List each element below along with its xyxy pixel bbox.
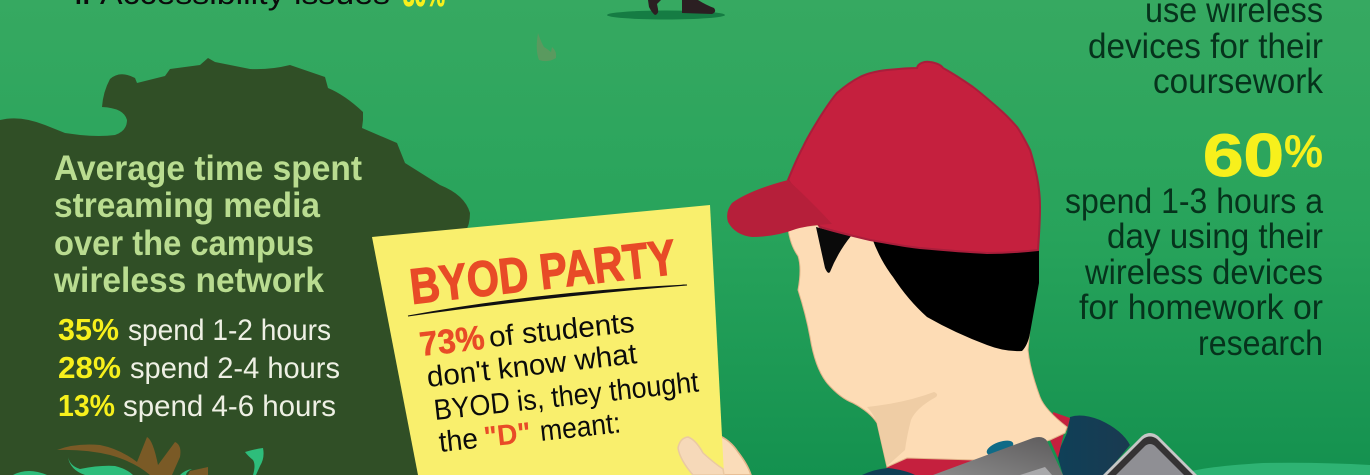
text: hours a day: wireless devices (1084, 253, 1323, 292)
tree leaves (13, 448, 264, 475)
text: use wireless devices: devices for their (1088, 27, 1323, 66)
cap crown (788, 62, 1040, 253)
stat list: 13% (58, 388, 115, 423)
stat list: spend 2-4 hours (130, 352, 340, 385)
cap brim (727, 180, 832, 237)
stat list: 28% (58, 350, 121, 385)
backpack strap (1057, 416, 1130, 475)
tree silhouette (0, 58, 470, 475)
ground hill (1180, 463, 1370, 475)
shirt collar back (1050, 412, 1070, 458)
icon: thumb on flyer (678, 437, 724, 475)
head and neck (788, 225, 1067, 467)
text: hours a day: spend 1-3 hours a (1065, 182, 1323, 221)
panel: tree with streaming stats (0, 58, 470, 475)
heading: average time spent: streaming media (54, 186, 321, 225)
text: use wireless devices: coursework (1153, 62, 1323, 101)
shirt collar front (880, 458, 975, 475)
heading: average time spent: Average time spent (54, 149, 362, 188)
hair (872, 238, 1039, 351)
teal spot (985, 438, 1015, 458)
tree branches (57, 437, 208, 475)
hand fingers behind flyer (715, 435, 751, 475)
stat: 60%: 60 (1203, 122, 1284, 189)
flyer text: 73% (418, 319, 486, 364)
left strap (862, 468, 915, 475)
stat list (58, 312, 340, 423)
text: accessibility issues (76, 0, 445, 10)
figure: student from behind (727, 62, 1197, 475)
text: use wireless devices (1088, 0, 1323, 101)
flyer title: BYOD PARTY (407, 229, 679, 315)
flyer text (418, 307, 700, 459)
heading: average time spent (53, 149, 362, 300)
flyer text: "D" (482, 417, 532, 454)
neck shadow (867, 392, 937, 466)
flyer text: don't know what (425, 338, 638, 394)
text: hours a day (1065, 182, 1323, 363)
stat list: 35% (58, 312, 119, 347)
icon: feet and shadow (607, 0, 725, 20)
panel: BYOD party flyer (372, 205, 724, 475)
stat: 60% (1203, 122, 1323, 189)
flyer text: of students (487, 307, 636, 354)
sideburn (816, 227, 851, 273)
text: hours a day: research (1198, 324, 1323, 363)
flyer paper (372, 205, 724, 475)
tablet (933, 437, 1063, 475)
stat: 60%: % (1284, 125, 1323, 177)
heading: average time spent: wireless network (53, 261, 325, 300)
icon: grass tuft (537, 33, 556, 61)
phone (1103, 433, 1197, 475)
flyer text: the (437, 423, 480, 459)
text: hours a day: for homework or (1079, 288, 1323, 327)
text: hours a day: day using their (1107, 217, 1323, 256)
flyer text: meant: (538, 407, 622, 448)
tablet screen (1020, 467, 1052, 475)
flyer text: BYOD is, they thought (432, 366, 700, 427)
title underline (408, 285, 687, 316)
panel: right-hand statistics (1065, 0, 1323, 363)
stat list: spend 1-2 hours (128, 314, 331, 347)
heading: average time spent: over the campus (54, 224, 314, 263)
stat list: spend 4-6 hours (123, 390, 336, 423)
